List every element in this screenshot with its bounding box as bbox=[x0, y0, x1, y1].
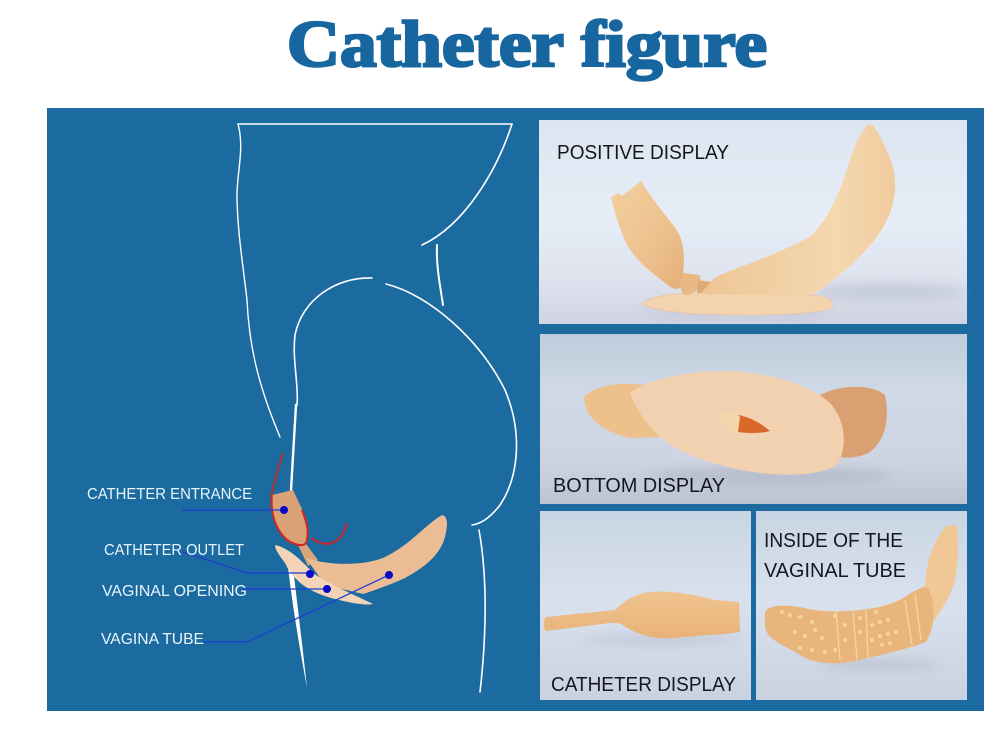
catheter cup bbox=[611, 181, 684, 289]
label: BOTTOM DISPLAY bbox=[553, 474, 725, 497]
connecting neck bbox=[298, 544, 318, 566]
red contour lines bbox=[272, 453, 283, 493]
upper tube bbox=[920, 526, 958, 620]
right tube bbox=[820, 387, 887, 458]
left tube bbox=[584, 384, 665, 438]
catheter bbox=[544, 592, 740, 638]
opening bbox=[738, 415, 770, 433]
surface dots bbox=[780, 610, 898, 654]
label: vaginal opening: VAGINAL OPENING bbox=[102, 583, 247, 600]
base plate bbox=[642, 293, 833, 315]
vaginal tube bbox=[306, 515, 447, 594]
textured tube bbox=[765, 587, 934, 663]
base plate bbox=[275, 545, 373, 605]
label: catheter outlet: CATHETER OUTLET bbox=[104, 542, 244, 559]
label: CATHETER DISPLAY bbox=[551, 673, 736, 696]
label: second line of inside of the vaginal tube: VAGINAL TUBE bbox=[764, 559, 906, 582]
label: catheter entrance: CATHETER ENTRANCE bbox=[87, 486, 252, 503]
body outline diagram bbox=[237, 124, 516, 692]
vaginal tube bbox=[700, 124, 895, 295]
panel: inside of the vaginal tube bbox=[756, 511, 967, 700]
device diagram bbox=[272, 453, 447, 605]
plate bbox=[630, 371, 844, 475]
panel: catheter display bbox=[540, 511, 751, 700]
label: INSIDE OF THE bbox=[764, 529, 903, 552]
label: POSITIVE DISPLAY bbox=[557, 141, 729, 164]
lower leg tapered line bbox=[288, 567, 307, 688]
label: vagina tube: VAGINA TUBE bbox=[101, 631, 204, 648]
title: Catheter figure bbox=[287, 8, 767, 81]
panel: positive display bbox=[539, 120, 967, 324]
callout lines and dots bbox=[182, 506, 393, 642]
panel: blue background bbox=[47, 108, 984, 711]
panel: bottom display bbox=[540, 334, 967, 504]
neck bbox=[680, 273, 700, 295]
catheter cup bbox=[272, 490, 308, 545]
